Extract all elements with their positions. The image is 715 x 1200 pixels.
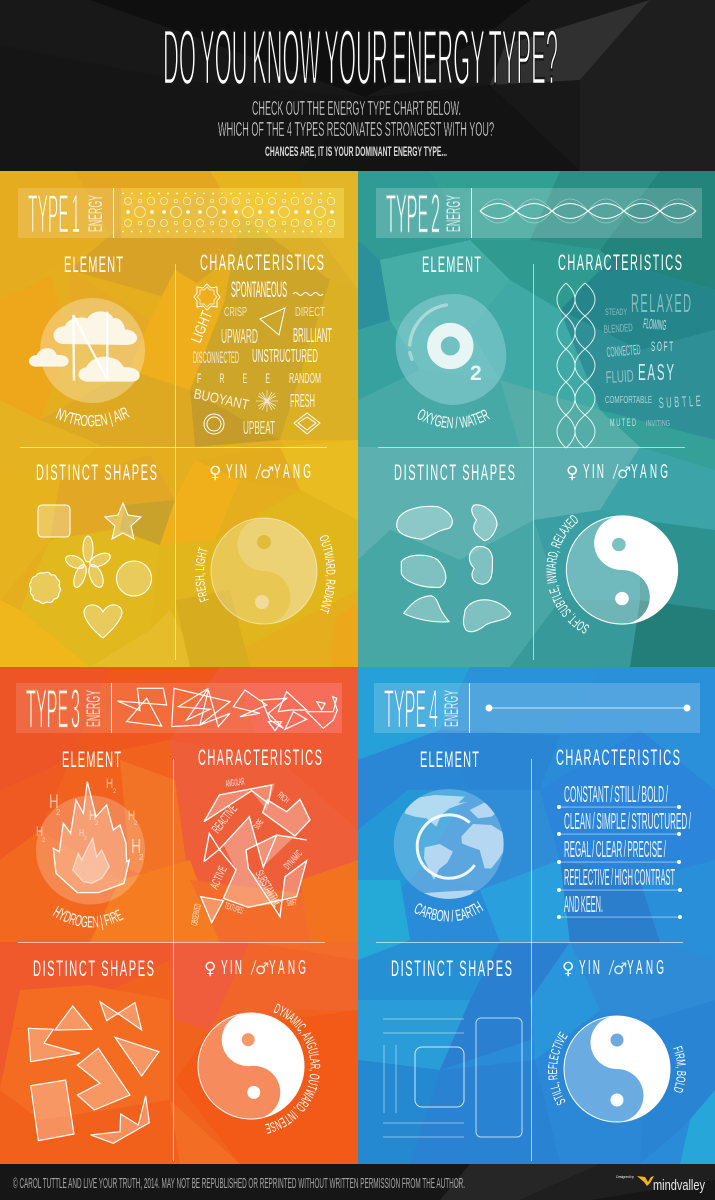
characteristics: angular shapes with words: ANGULAR xyxy=(225,776,245,790)
distinct shapes: type 4 rectangles and lines xyxy=(383,1018,522,1137)
icon: flame in circle: H xyxy=(49,792,59,813)
label: carbon / earth: CARBON / EARTH xyxy=(414,901,484,922)
characteristics: angular shapes with words: SWIFT xyxy=(286,897,297,908)
heading: yin yang: YANG xyxy=(269,958,306,979)
heading: characteristics: CHARACTERISTICS xyxy=(198,745,322,770)
curved label: fresh, light: FRESH, LIGHT xyxy=(195,546,209,602)
icon: clouds in circle xyxy=(29,298,145,403)
banner: type 2 xyxy=(376,182,702,244)
dividers xyxy=(18,759,325,1161)
characteristics word cloud: type 2: EASY xyxy=(638,360,674,385)
heading: yin yang: ♀ xyxy=(562,959,574,979)
heading: yin yang: YANG xyxy=(274,462,311,483)
icon: flame in circle: 2 xyxy=(56,808,61,817)
heading: yin yang: YIN xyxy=(221,958,242,979)
heading: yin yang xyxy=(566,462,668,483)
panel: type 1: BRILLIANT xyxy=(293,325,332,347)
banner: type 4: TYPE 4 xyxy=(384,678,438,740)
icon: flame in circle: H xyxy=(128,807,135,823)
banner: type 3: ENERGY xyxy=(84,690,105,727)
heading: yin yang: YIN xyxy=(226,462,247,483)
heading: yin yang: ♀ xyxy=(566,463,578,483)
heading: characteristics: CHARACTERISTICS xyxy=(558,250,682,275)
heading: yin yang xyxy=(209,462,311,483)
banner: type 3 xyxy=(16,678,342,740)
characteristics word cloud: type 1: LIGHT xyxy=(188,309,216,345)
heading: yin yang xyxy=(562,958,664,979)
dividers xyxy=(20,264,327,660)
heading: distinct shapes: DISTINCT SHAPES xyxy=(36,460,157,485)
yin yang: type 2 xyxy=(566,516,678,624)
characteristics word cloud: type 1: CRISP xyxy=(224,304,247,319)
characteristics word cloud: type 1: FREE xyxy=(197,372,270,387)
heading: yin yang xyxy=(204,958,306,979)
heading: yin yang: ♀ xyxy=(204,959,216,979)
characteristics: angular shapes with words xyxy=(189,776,310,926)
heading: yin yang: ♂ xyxy=(613,959,627,978)
characteristics: angular shapes with words: RICH xyxy=(276,790,291,805)
characteristics word cloud: type 2: MUTED xyxy=(610,416,636,429)
curved label: soft, subtle: SOFT, SUBTLE, INWARD, RELAXED xyxy=(546,515,589,634)
characteristics word cloud: type 2: SUBTLE xyxy=(658,392,701,412)
characteristics: angular shapes with words: REACTIVE xyxy=(209,801,240,836)
type 4 background xyxy=(358,667,715,1164)
label: nitrogen / air: NYTROGEN | AIR xyxy=(56,408,130,427)
characteristics: angular shapes with words: TEXTURES xyxy=(223,900,245,916)
yin yang: type 1 xyxy=(211,518,317,624)
characteristics: angular shapes with words: OBSERVED xyxy=(189,903,203,926)
banner: type 4: ENERGY xyxy=(442,690,463,727)
heading: yin yang: YANG xyxy=(631,462,668,483)
heading: distinct shapes: DISTINCT SHAPES xyxy=(394,460,515,485)
heading: yin yang: YIN xyxy=(579,958,600,979)
characteristics word cloud: type 1: DISCONNECTED xyxy=(193,348,239,367)
heading: yin yang: ♂ xyxy=(617,463,631,482)
banner: type 2: ENERGY xyxy=(444,195,465,232)
subtitle: CHANCES ARE, IT IS YOUR DOMINANT ENERGY TYPE... xyxy=(265,143,447,159)
characteristics word cloud: type 2: SOFT xyxy=(651,339,673,355)
heading: element: ELEMENT xyxy=(62,747,121,772)
characteristics word cloud: type 2: RELAXED xyxy=(631,290,691,319)
heading: distinct shapes: DISTINCT SHAPES xyxy=(33,956,154,981)
heading: yin yang: ♂ xyxy=(260,463,274,482)
heading: characteristics: CHARACTERISTICS xyxy=(200,250,324,275)
characteristics list: AND KEEN. xyxy=(564,891,603,917)
banner: type 1: TYPE 1 xyxy=(28,182,80,244)
characteristics: braided waves xyxy=(557,283,595,448)
characteristics: angular shapes with words: SURE xyxy=(251,817,265,831)
mindvalley logo xyxy=(616,1174,705,1194)
characteristics word cloud: type 2: STEADY xyxy=(605,307,627,317)
icon: oxygen bubble xyxy=(396,294,506,405)
heading: yin yang: YIN xyxy=(583,462,604,483)
characteristics: angular shapes with words: ACTIVE xyxy=(207,864,230,891)
icon: flame in circle: H xyxy=(106,775,113,791)
characteristics word cloud: type 1 xyxy=(188,277,332,438)
icon: flame in circle: H xyxy=(131,834,141,858)
banner: type 1: ENERGY xyxy=(86,195,107,232)
label: oxygen / water: OXYGEN / WATER xyxy=(418,409,490,428)
characteristics: angular shapes with words: DYNAMIC xyxy=(282,848,305,872)
heading: element: ELEMENT xyxy=(420,747,479,772)
icon: flame in circle: 2 xyxy=(134,821,138,827)
panel: type 2 xyxy=(358,171,715,667)
characteristics word cloud: type 2: CONNECTED xyxy=(606,341,641,360)
footer xyxy=(0,1164,715,1200)
distinct shapes: type 1 xyxy=(30,503,152,638)
heading: element: ELEMENT xyxy=(64,252,123,277)
characteristics word cloud: type 1: UPBEAT xyxy=(243,418,275,438)
icon: flame in circle: H xyxy=(36,823,43,839)
distinct shapes: type 3 polygons xyxy=(28,1002,159,1143)
curved label: dynamic: DYNAMIC, ANGULAR, OUTWARD, INTENSE xyxy=(264,1003,320,1134)
panel: type 3 xyxy=(0,667,358,1164)
yin yang: type 4 xyxy=(564,1016,670,1122)
icon: flame in circle: H xyxy=(79,827,84,838)
icon: flame in circle: 2 xyxy=(42,838,46,844)
characteristics word cloud: type 2: INVITING xyxy=(646,419,670,428)
icon: flame in circle: 2 xyxy=(84,836,87,842)
heading: yin yang: YANG xyxy=(627,958,664,979)
characteristics word cloud: type 2 xyxy=(603,290,701,429)
banner: type 1 xyxy=(18,182,344,244)
yin yang: type 3 xyxy=(193,1008,309,1124)
characteristics word cloud: type 1: DIRECT xyxy=(295,304,325,319)
heading: characteristics: CHARACTERISTICS xyxy=(556,745,680,770)
curved label: outward, radiant: OUTWARD, RADIANT xyxy=(320,535,336,614)
banner: type 3: TYPE 3 xyxy=(26,678,80,740)
characteristics word cloud: type 1: FRESH xyxy=(290,391,315,411)
characteristics word cloud: type 1: BUOYANT xyxy=(192,385,251,413)
mindvalley logo: Designed by xyxy=(616,1174,634,1179)
characteristics word cloud: type 2: FLUID xyxy=(605,367,634,387)
oxygen subscript: 2 xyxy=(470,362,482,385)
characteristics word cloud: type 1: RANDOM xyxy=(289,370,321,387)
header background xyxy=(0,0,715,171)
panel: type 1 xyxy=(0,171,358,667)
type 3 background xyxy=(0,667,358,1164)
heading: yin yang: ♀ xyxy=(209,463,221,483)
characteristics word cloud: type 2: BLENDED xyxy=(603,322,633,336)
icon: earth with cycle arrow xyxy=(394,789,505,902)
curved label: still, reflective: STILL, REFLECTIVE xyxy=(548,1031,568,1106)
characteristics word cloud: type 2: COMFORTABLE xyxy=(605,395,652,406)
icon: flame in circle: H xyxy=(89,807,96,823)
distinct shapes: type 2 blobs xyxy=(397,505,511,632)
type 2 background xyxy=(358,171,715,667)
icon: flame in circle: 2 xyxy=(113,789,117,795)
icon: flame in circle: 2 xyxy=(95,821,99,827)
characteristics word cloud: type 1: SPONTANEOUS xyxy=(231,277,287,302)
dividers xyxy=(376,759,683,1161)
label: hydrogen / fire: HYDROGEN | FIRE xyxy=(52,906,124,930)
banner: type 4 xyxy=(374,678,700,740)
banner: type 2: TYPE 2 xyxy=(386,182,440,244)
heading: distinct shapes: DISTINCT SHAPES xyxy=(391,956,512,981)
characteristics word cloud: type 1: UNSTRUCTURED xyxy=(252,346,318,366)
subtitle: CHECK OUT THE ENERGY TYPE CHART BELOW. xyxy=(252,98,461,120)
type 1 background xyxy=(0,171,358,667)
icon: flame in circle xyxy=(36,775,145,904)
subtitle xyxy=(218,98,494,159)
characteristics list xyxy=(557,781,691,919)
icon: flame in circle: 2 xyxy=(139,853,144,862)
dividers xyxy=(378,264,685,660)
curved label: firm, bold: FIRM, BOLD xyxy=(673,1046,686,1093)
heading: yin yang: ♂ xyxy=(255,959,269,978)
characteristics word cloud: type 2: FLOWING xyxy=(643,315,667,333)
characteristics: angular shapes with words: SUBSTANTIAL xyxy=(252,868,285,909)
panel: type 4 xyxy=(358,667,715,1164)
heading: element: ELEMENT xyxy=(422,252,481,277)
characteristics word cloud: type 1: UPWARD xyxy=(221,326,258,348)
